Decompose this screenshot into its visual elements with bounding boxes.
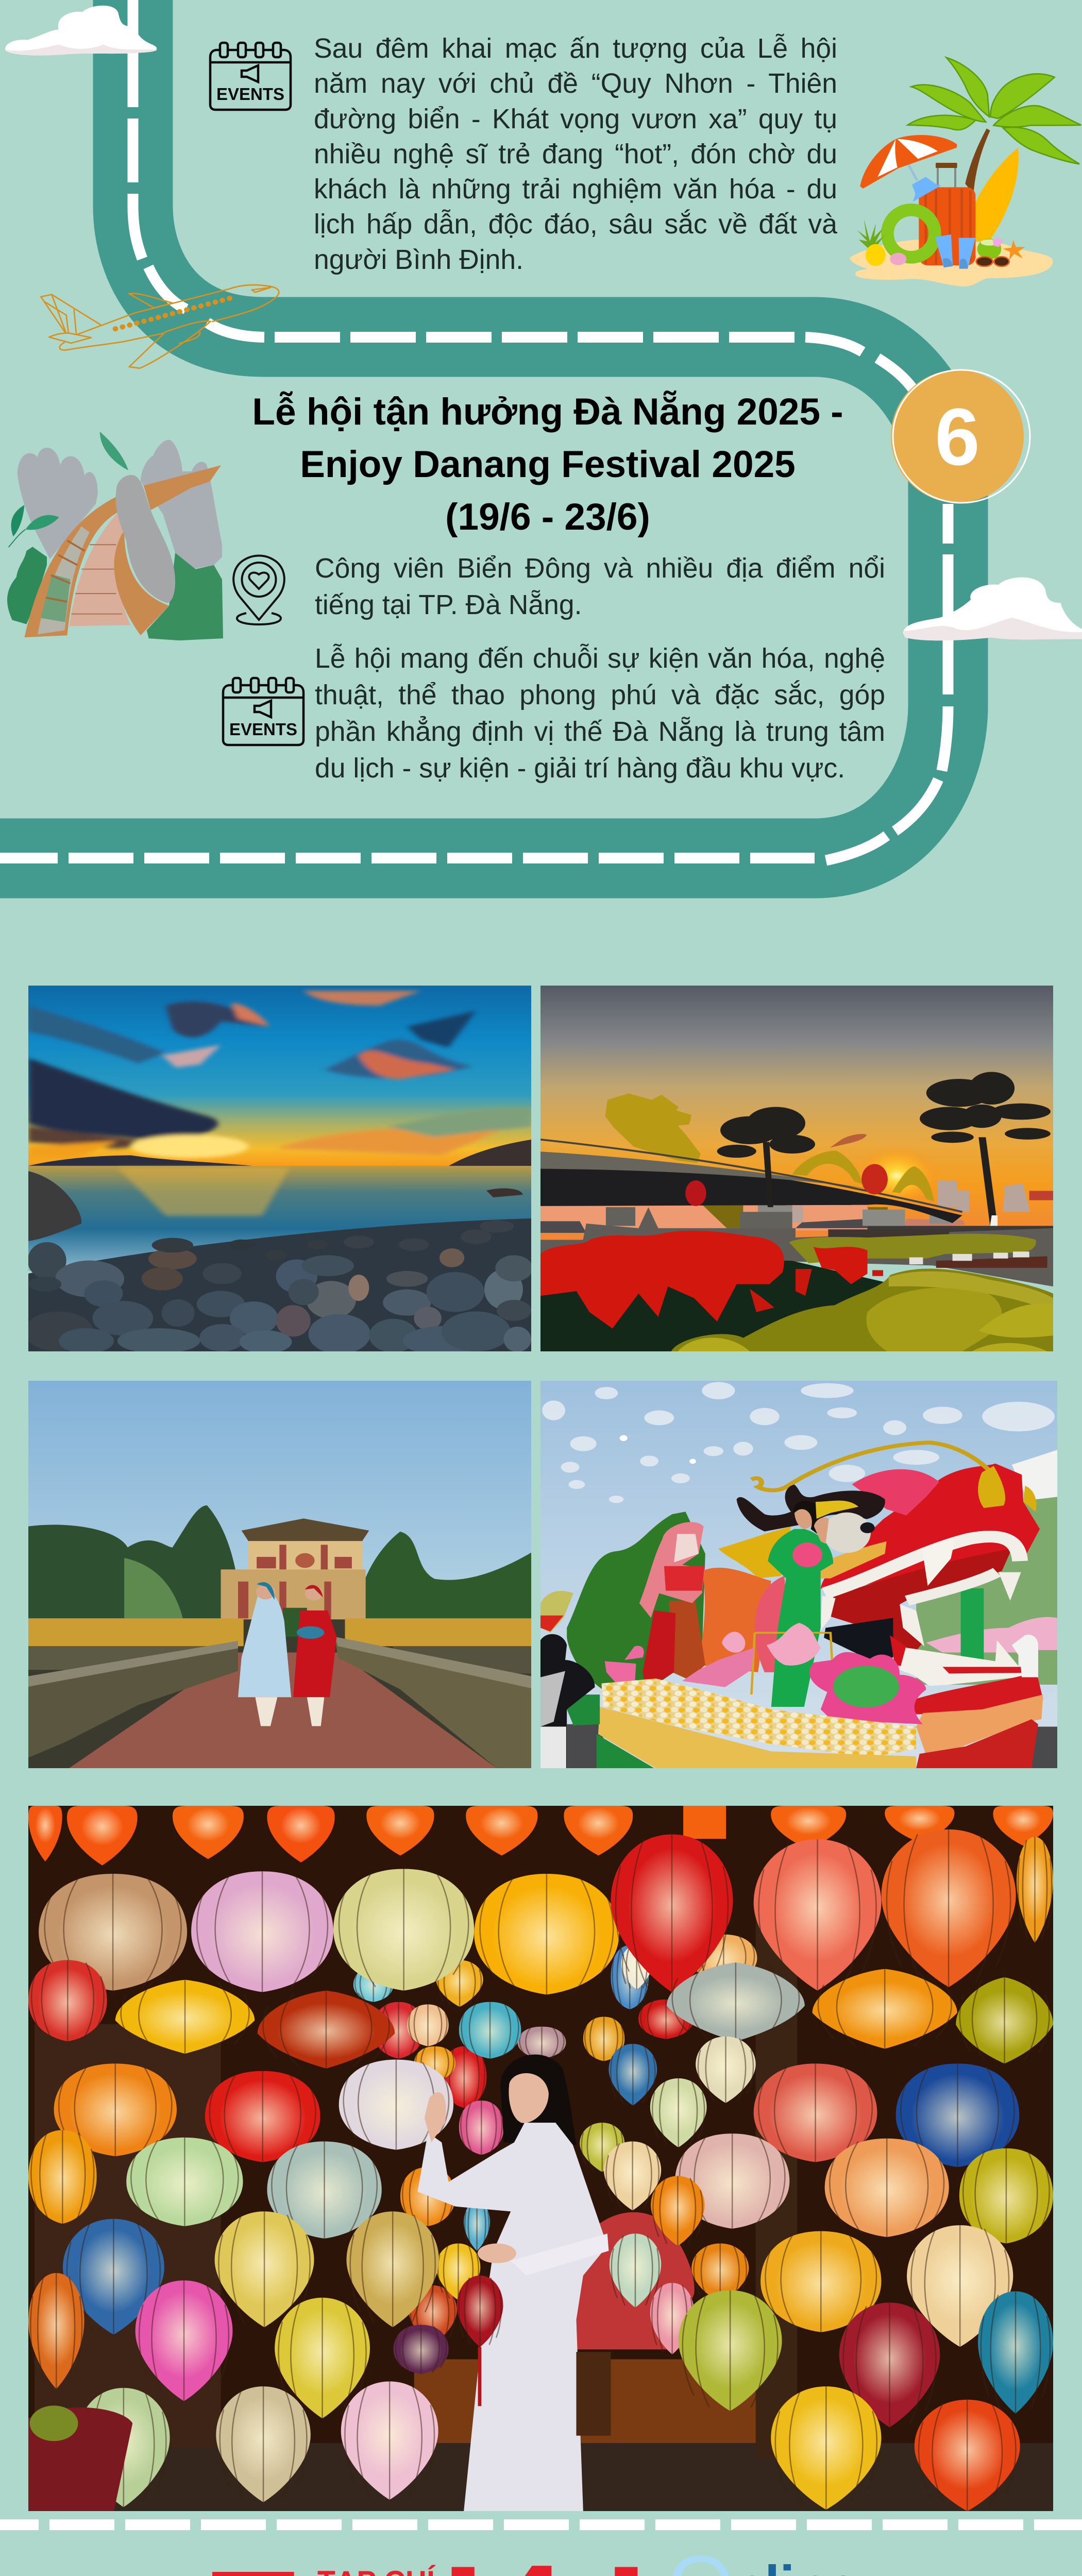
cloud top left: [5, 5, 158, 56]
heading: Lễ hội tận hưởng Đà Nẵng 2025 -: [252, 391, 843, 433]
festival description text: Lễ hội mang đến chuỗi sự kiện văn hóa, nghệ: [315, 643, 885, 674]
festival description text: phần khẳng định vị thế Đà Nẵng là trung tâm: [315, 717, 885, 747]
winding road: [0, 0, 988, 899]
location text: tiếng tại TP. Đà Nẵng.: [315, 590, 582, 620]
location text: Công viên Biển Đông và nhiều địa điểm nổi: [315, 553, 885, 584]
road surface: [0, 0, 948, 858]
badge: number 6: [891, 369, 1030, 504]
intro text block: năm nay với chủ đề “Quy Nhơn - Thiên: [314, 69, 837, 99]
intro text block: [314, 33, 837, 275]
icon: events calendar: EVENTS: [229, 720, 297, 739]
festival description text: du lịch - sự kiện - giải trí hàng đầu khu vực.: [315, 753, 845, 784]
heading: Enjoy Danang Festival 2025: [300, 444, 796, 485]
logo: Tạp chí Tài chính Online: [206, 2550, 876, 2576]
photo: dragon float festival parade: [540, 1381, 1057, 1768]
illustration: golden hands bridge: [7, 432, 223, 641]
festival description text: [315, 643, 885, 784]
icon: location pin with heart: [232, 554, 285, 625]
intro text block: lịch hấp dẫn, độc đáo, sâu sắc về đất và: [314, 209, 837, 240]
intro text block: người Bình Định.: [314, 245, 523, 275]
heading: (19/6 - 23/6): [445, 496, 650, 538]
heading: [252, 391, 843, 538]
illustration: beach with palm tree and luggage: [850, 56, 1081, 286]
intro text block: Sau đêm khai mạc ấn tượng của Lễ hội: [314, 33, 837, 64]
intro text block: nhiều nghệ sĩ trẻ đang “hot”, đón chờ du: [314, 139, 837, 170]
festival description text: thuật, thể thao phong phú và đặc sắc, góp: [315, 680, 885, 710]
icon: events calendar: [209, 41, 292, 111]
cloud right: [902, 572, 1082, 644]
icon: events calendar: EVENTS: [216, 84, 284, 104]
badge: number 6: 6: [935, 392, 980, 482]
intro text block: đường biển - Khát vọng vươn xa” quy tụ: [314, 104, 837, 134]
photo: Hoi An lanterns with woman in white ao dai: [28, 1806, 1053, 2511]
bottom road dashes: [0, 2517, 1082, 2533]
photo: Hue imperial citadel with women in ao dai: [28, 1381, 531, 1768]
photo: Quy Nhon sunset over pebble beach: [28, 986, 531, 1351]
photo: Dragon Bridge at sunset with flowers: [540, 986, 1053, 1351]
intro text block: khách là những trải nghiệm văn hóa - du: [314, 174, 837, 205]
icon: airplane outline: [40, 284, 280, 369]
icon: events calendar: [219, 674, 309, 751]
location text: [315, 553, 885, 620]
road centre dashes: [0, 0, 948, 860]
